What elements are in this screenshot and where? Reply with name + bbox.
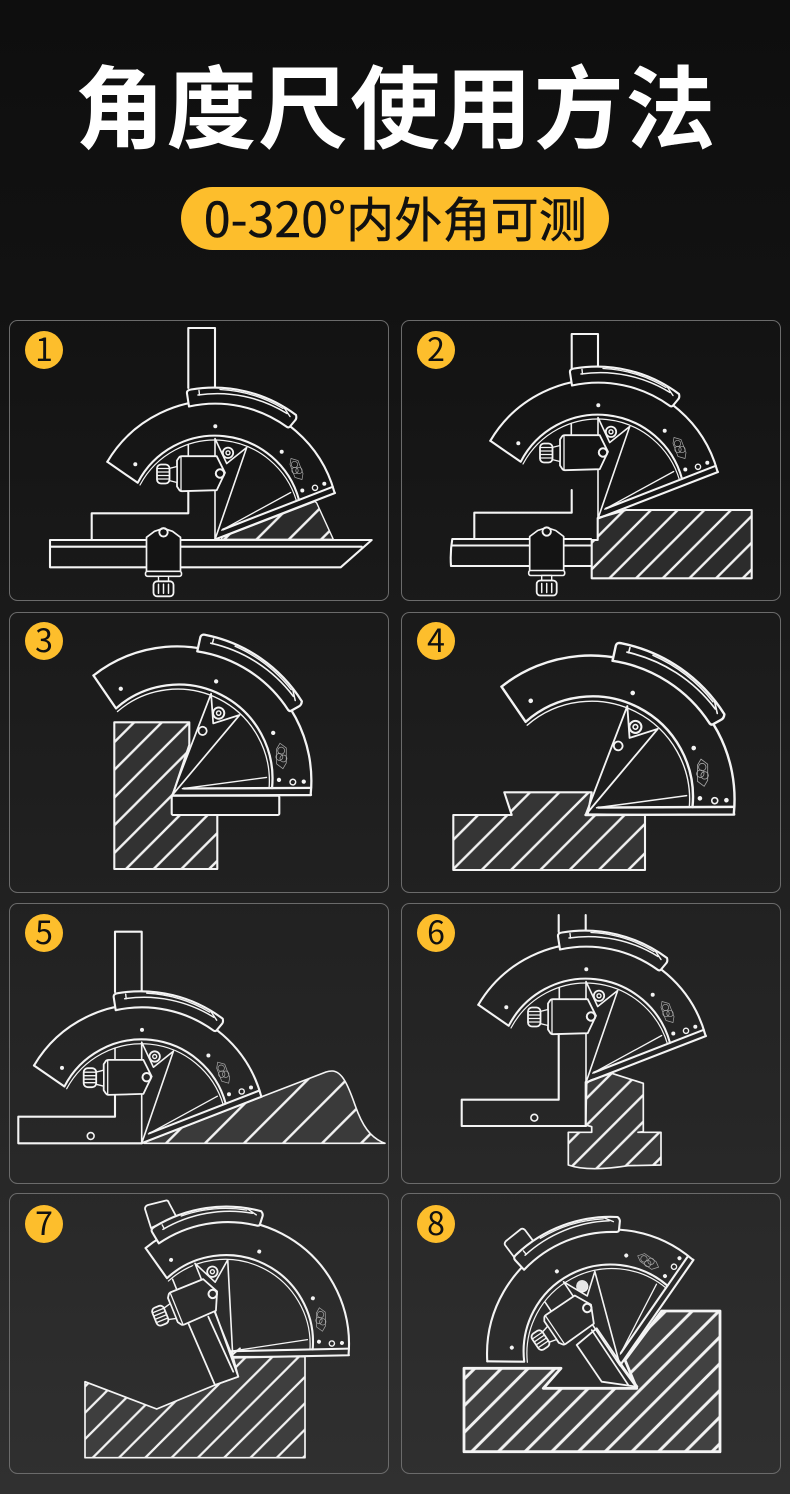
panel 8 [402,1183,780,1474]
base bar 2 [451,539,591,566]
badge 6 [417,908,455,954]
clamp 1 [146,528,182,596]
slider head 6 [528,988,596,1034]
vernier cap 3 [187,631,313,714]
protractor arc 6 [478,944,706,1082]
badge 8 [417,1199,455,1245]
workpiece 6 [568,1073,661,1169]
workpiece 3 [114,722,217,869]
protractor arc 4 [469,621,772,865]
hinge triangle 1 [215,438,247,540]
panel 2 [402,320,780,600]
stem edges 7 [188,1312,240,1385]
slider head 7 [144,1266,224,1334]
vernier cap 4 [602,640,736,728]
stem fill 7 [186,1263,238,1385]
vernier cap 1 [187,388,296,427]
slider head 1 [157,445,225,491]
hinge triangle 4 [586,706,661,828]
hinge triangle 6 [586,982,618,1082]
pivot disc 8 [576,1280,588,1291]
hole 5 [87,1133,94,1139]
slider head 8 [519,1282,601,1358]
badge 1 [25,325,63,371]
vernier cap 5 [114,991,223,1031]
badge 5 [25,908,63,954]
workpiece 8 [464,1311,720,1452]
badge 5: 5 [35,908,53,954]
hinge triangle 2 [598,418,630,518]
panel 6 [402,904,780,1184]
stem inner edge 8 [592,1330,628,1385]
stem 2 [474,334,598,539]
badge 2 [417,325,455,371]
protractor arc 7 [119,1191,380,1399]
panel 4 [402,612,780,892]
badge 7 [25,1199,63,1245]
stem and foot 6 [462,915,586,1126]
badge 4: 4 [427,616,445,662]
lower blade 3 [172,796,279,815]
panel 1 [10,320,388,600]
workpiece 4 [453,792,645,870]
vernier cap 6 [558,931,667,970]
vernier cap 8 [512,1194,625,1288]
hole 6 [531,1114,538,1121]
blade edge 8 [617,1360,637,1387]
badge 2: 2 [427,325,445,371]
workpiece 7 [85,1357,305,1458]
panel 7 [10,1186,388,1474]
protractor arc 2 [490,380,718,518]
protractor arc 8 [453,1183,719,1426]
badge 1: 1 [35,325,53,371]
badge 8: 8 [427,1199,445,1245]
hinge triangle 5 [142,1042,173,1143]
panel 3 [10,612,388,892]
base bar 1 [50,540,372,567]
badge 3: 3 [35,616,53,662]
badge 6: 6 [427,908,445,954]
stem 8 [577,1328,637,1387]
workpiece 2 [592,510,752,578]
slider head 2 [540,424,608,470]
panel 5 [10,904,388,1184]
stem and foot 5 [18,932,142,1143]
slider head 5 [84,1049,152,1095]
workpiece 5 [144,1071,385,1143]
protractor arc 5 [34,1004,262,1143]
stem 1 [92,328,215,540]
clamp 2 [529,527,565,596]
vernier cap 2 [570,367,679,406]
protractor arc 3 [63,614,347,842]
title: 角度尺使用方法 [75,61,717,161]
badge 7: 7 [35,1199,53,1245]
badge 3 [25,616,63,662]
hinge triangle 8 [564,1264,646,1366]
protractor arc 1 [107,401,335,540]
top stop knob 8 [505,1229,534,1261]
workpiece 1 [222,502,333,539]
top stop knob 7 [145,1200,176,1228]
badge 4 [417,616,455,662]
right stem edge 6 [585,1082,587,1126]
hinge triangle 3 [172,694,243,808]
vernier cap 7 [150,1186,266,1264]
subtitle pill: 0-320°内外角可测 [204,181,587,251]
hinge triangle 7 [195,1251,262,1357]
